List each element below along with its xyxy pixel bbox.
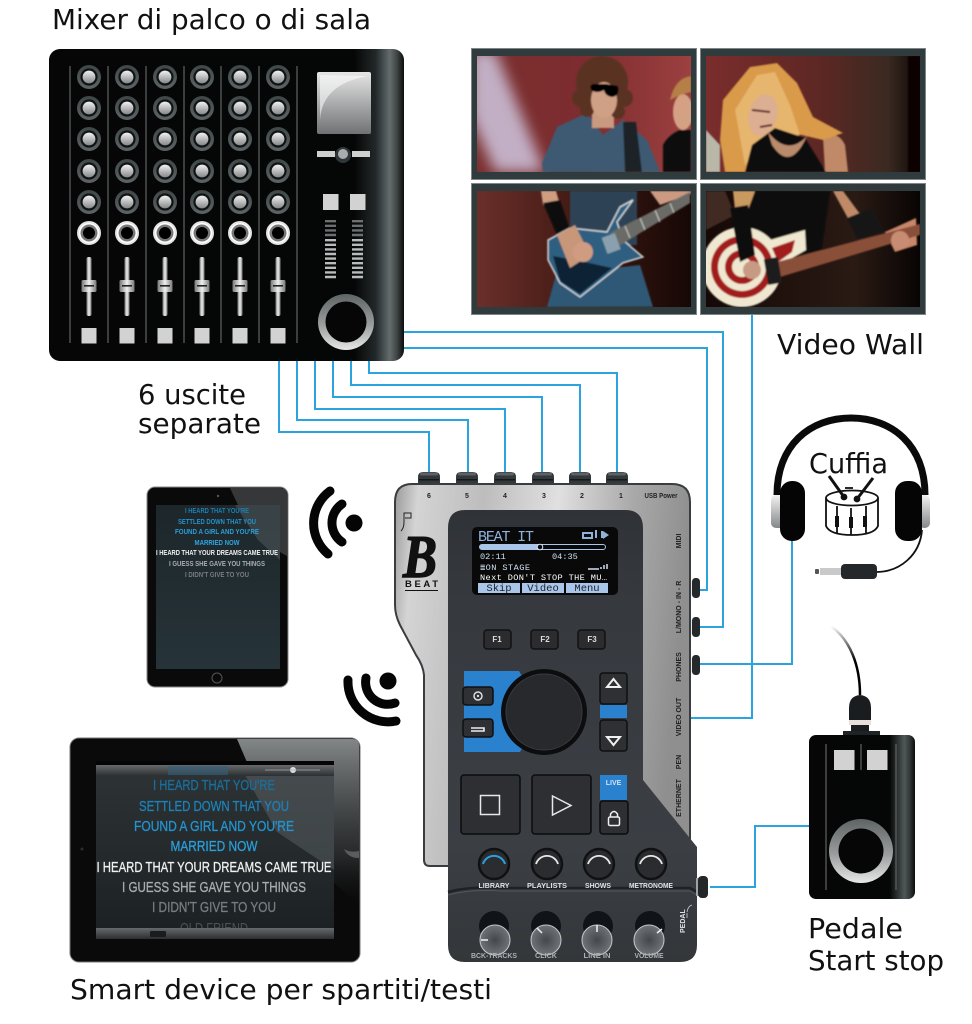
channel 3 [153,65,177,344]
master wheel [318,294,374,350]
mode buttons: PLAYLISTS [527,883,567,890]
ear cups [771,481,930,541]
icon: wifi bottom [348,672,396,722]
level meters [325,220,363,278]
mixer display [317,72,371,134]
pedal label [680,905,692,933]
label: 6 uscite separate: 6 uscite [138,378,246,411]
photo: guitarist, head and shoulders [470,50,693,172]
silver chassis [395,484,690,866]
port numbers: 3 [542,493,546,500]
right side jacks [689,578,700,675]
live and lock: LIVE [606,780,622,787]
function buttons: F3 [587,635,597,644]
master buttons [323,194,366,210]
pedal cable [831,626,860,695]
dark control panel [448,510,697,962]
oled display: Video [527,583,559,595]
side connector labels: VIDEO OUT [676,697,683,736]
port numbers: 4 [503,493,507,500]
level knobs: VOLUME [634,953,664,960]
side connector labels: MIDI [676,534,683,548]
mode buttons: SHOWS [585,883,611,890]
mode buttons [478,849,673,890]
port numbers: 1 [619,493,623,500]
mixer console [49,49,404,361]
small tablet lyrics [156,506,278,579]
crossfader [317,147,370,163]
stop button [461,775,520,834]
port numbers: USB Power [644,493,678,500]
large tablet lyrics: MARRIED NOW [170,838,258,855]
photo: singer, blond hair [706,56,920,172]
small tablet lyrics: I HEARD THAT YOUR DREAMS CAME TRUE [156,548,278,557]
beat logo: BEAT [405,579,438,590]
headphone cable and plug [815,530,922,579]
pedal jack [696,876,708,898]
channel 4 [190,65,214,344]
large tablet lyrics: I DIDN'T GIVE TO YOU [152,899,276,916]
pedal buttons [834,750,888,770]
large tablet lyrics: OLD FRIEND [180,920,248,937]
function buttons [484,630,605,649]
icon: wifi top [314,491,362,554]
small tablet lyrics: I HEARD THAT YOU'RE [185,506,249,515]
label: pedale start stop: Pedale [808,912,903,945]
function buttons: F2 [540,635,550,644]
mode buttons: LIBRARY [478,883,510,890]
small tablet lyrics: I DIDN'T GIVE TO YOU [185,570,249,579]
small tablet lyrics: FOUND A GIRL AND YOU'RE [175,527,259,536]
side connector labels: L/MONO - IN - R [676,581,683,633]
oled display [472,527,618,595]
side connector labels: PHONES [676,652,683,682]
oled display: 02:11 [480,552,506,562]
large tablet lyrics: FOUND A GIRL AND YOU'RE [134,818,294,835]
blue highlights [464,671,627,752]
foot pedal [809,626,915,899]
headband [777,418,925,495]
top audio ports [418,472,628,483]
main wheel [501,669,587,755]
headphones icon with drum [771,418,930,579]
status and toolbar [96,761,334,939]
label: pedale start stop [808,912,944,977]
port numbers: 2 [580,493,584,500]
label: cuffia: Cuffia [809,447,888,480]
mode buttons: METRONOME [629,883,673,890]
channel 6 [266,65,290,344]
side connector labels: ETHERNET [676,778,683,817]
function buttons: F1 [492,635,502,644]
large tablet lyrics: I GUESS SHE GAVE YOU THINGS [122,879,306,896]
label: video wall: Video Wall [777,328,924,361]
oled display: 04:35 [552,552,578,562]
port numbers: 6 [427,493,431,500]
level knobs: BCK-TRACKS [471,953,517,960]
port numbers: 5 [465,493,469,500]
pedal ring [829,819,893,883]
large tablet lyrics: I HEARD THAT YOUR DREAMS CAME TRUE [96,859,332,876]
settings and back buttons [463,687,493,737]
title: mixer: Mixer di palco o di sala [52,3,371,36]
channel 5 [228,65,252,344]
level knobs: LINE IN [584,953,610,960]
beat device [395,484,697,962]
pedal label: PEDAL [680,909,687,933]
oled display: ≣ON STAGE [480,563,530,573]
cables: blue connection wires [279,310,810,887]
oled display: BEAT IT [478,529,534,546]
large tablet [70,738,360,962]
channel 1 [77,65,101,344]
oled display: Menu [574,583,600,595]
channel 2 [115,65,139,344]
port numbers [427,493,678,500]
label: 6 uscite separate: separate [138,407,261,440]
video wall [470,48,926,314]
screen frames [472,48,926,314]
mixer channel strip dividers [70,66,297,343]
oled display: Next DON'T STOP THE MU… [480,573,607,583]
up and down buttons [600,673,627,751]
label: 6 uscite separate [138,378,261,440]
icon: drum [826,476,878,535]
small tablet [147,487,288,687]
label: pedale start stop: Start stop [808,944,944,977]
small tablet lyrics: SETTLED DOWN THAT YOU [178,517,256,526]
small tablet lyrics: MARRIED NOW [194,538,240,547]
pedal dividers [826,744,896,890]
photo: guitarist, blue guitar [477,191,691,307]
play button [532,775,591,834]
level knobs: CLICK [535,953,557,960]
large tablet lyrics: SETTLED DOWN THAT YOU [139,798,289,815]
photo: singer, striped guitar [702,191,920,307]
pedal connector [843,695,880,736]
level knobs [471,911,665,960]
side connector labels [676,534,683,817]
oled display: Skip [486,583,512,595]
small tablet lyrics: I GUESS SHE GAVE YOU THINGS [169,559,265,568]
label: smart device: Smart device per spartiti/testi [70,973,492,1006]
large tablet lyrics: I HEARD THAT YOU'RE [153,777,275,794]
beat logo: B [402,524,437,590]
live and lock [600,775,628,834]
side connector labels: PEN [676,755,683,769]
large tablet lyrics [96,777,332,937]
